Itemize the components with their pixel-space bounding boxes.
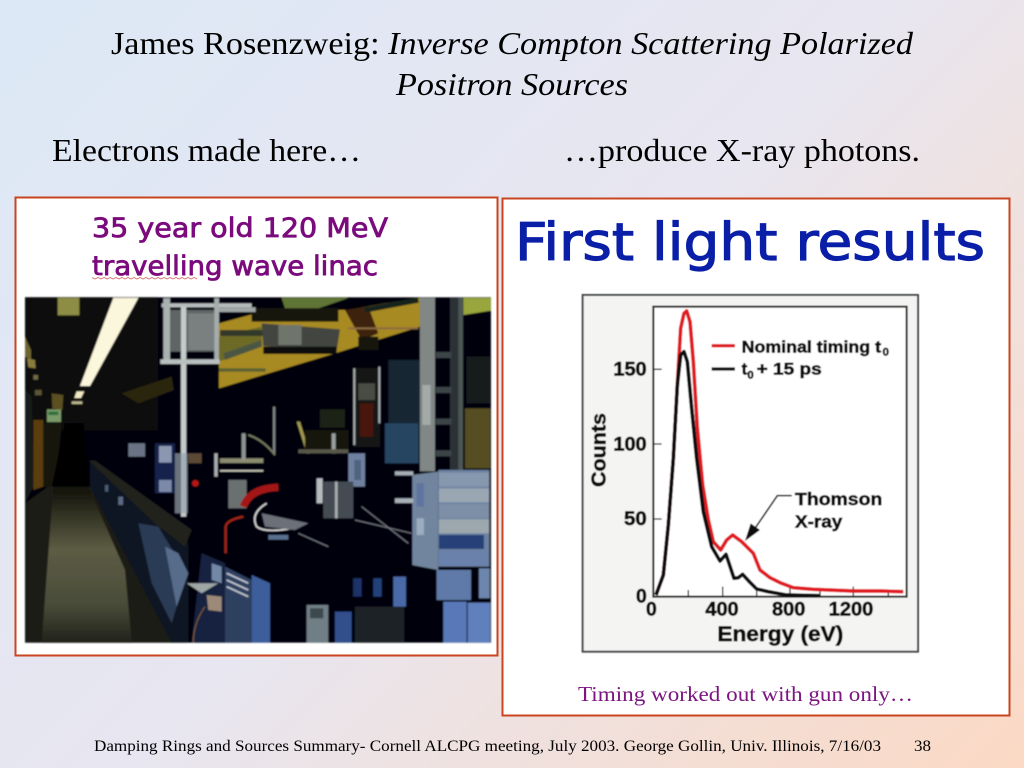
chart labels: 400: [705, 600, 739, 621]
chart labels: 0: [747, 369, 754, 381]
title: James Rosenzweig: Inverse Compton Scattering Polarized: [111, 25, 914, 61]
photo: linac tunnel: [25, 297, 491, 643]
black curve: t0 + 15 ps: [656, 352, 820, 596]
chart labels: Nominal timing t: [742, 337, 881, 356]
lead brick stack: [412, 472, 438, 570]
floor: [25, 487, 172, 643]
chart labels: t: [742, 359, 748, 378]
chart labels: 0: [636, 586, 647, 607]
chart labels: [587, 337, 889, 646]
instrument rack: [353, 368, 380, 447]
left caption: Electrons made here…: [52, 132, 361, 168]
beamline equipment: [128, 443, 145, 457]
chart note: Timing worked out with gun only…: [578, 682, 913, 706]
chart labels: Energy (eV): [717, 622, 843, 646]
linac heading: 35 year old 120 MeV: [92, 213, 389, 244]
title: Positron Sources: [395, 66, 628, 102]
panel: linac: [16, 198, 498, 656]
chart labels: 100: [613, 434, 647, 455]
linac heading: [92, 213, 389, 282]
spelling underline: [92, 278, 197, 279]
legend swatches: [712, 341, 735, 351]
red curve: nominal timing: [656, 311, 903, 595]
ceiling light: [80, 298, 138, 386]
axis ticks: [653, 369, 888, 597]
footer: Damping Rings and Sources Summary- Cornell ALCPG meeting, July 2003. George Gollin, Univ. Illinois, 7/16/03: [94, 738, 881, 755]
title: [111, 25, 914, 102]
aluminium frame and plate: [170, 310, 218, 352]
ceiling and walls: [25, 297, 174, 503]
chart labels: 0: [883, 347, 889, 359]
linac heading: travelling wave linac: [92, 251, 378, 282]
panel: first light results: [502, 198, 1010, 716]
chart labels: 50: [624, 509, 647, 530]
arrow: Thomson X-ray: [745, 496, 792, 541]
chart: counts versus energy: [583, 295, 918, 652]
lower rack bench: [90, 462, 188, 643]
yellow wall: [219, 298, 420, 388]
right caption: …produce X-ray photons.: [564, 132, 920, 168]
chart labels: 0: [646, 600, 657, 621]
overhead pipework: [252, 308, 338, 322]
chart labels: X-ray: [795, 512, 842, 532]
chart labels: Thomson: [795, 489, 882, 509]
chart labels: 150: [613, 360, 647, 381]
tall aluminium column: [420, 298, 435, 471]
chart labels: 1200: [829, 600, 873, 621]
plot area: [653, 307, 907, 597]
chart labels: Counts: [587, 413, 610, 487]
first light heading: First light results: [515, 213, 985, 273]
chart labels: + 15 ps: [757, 359, 822, 378]
page number: 38: [914, 738, 931, 755]
chart labels: 800: [772, 600, 805, 621]
chart frame: [583, 295, 918, 652]
